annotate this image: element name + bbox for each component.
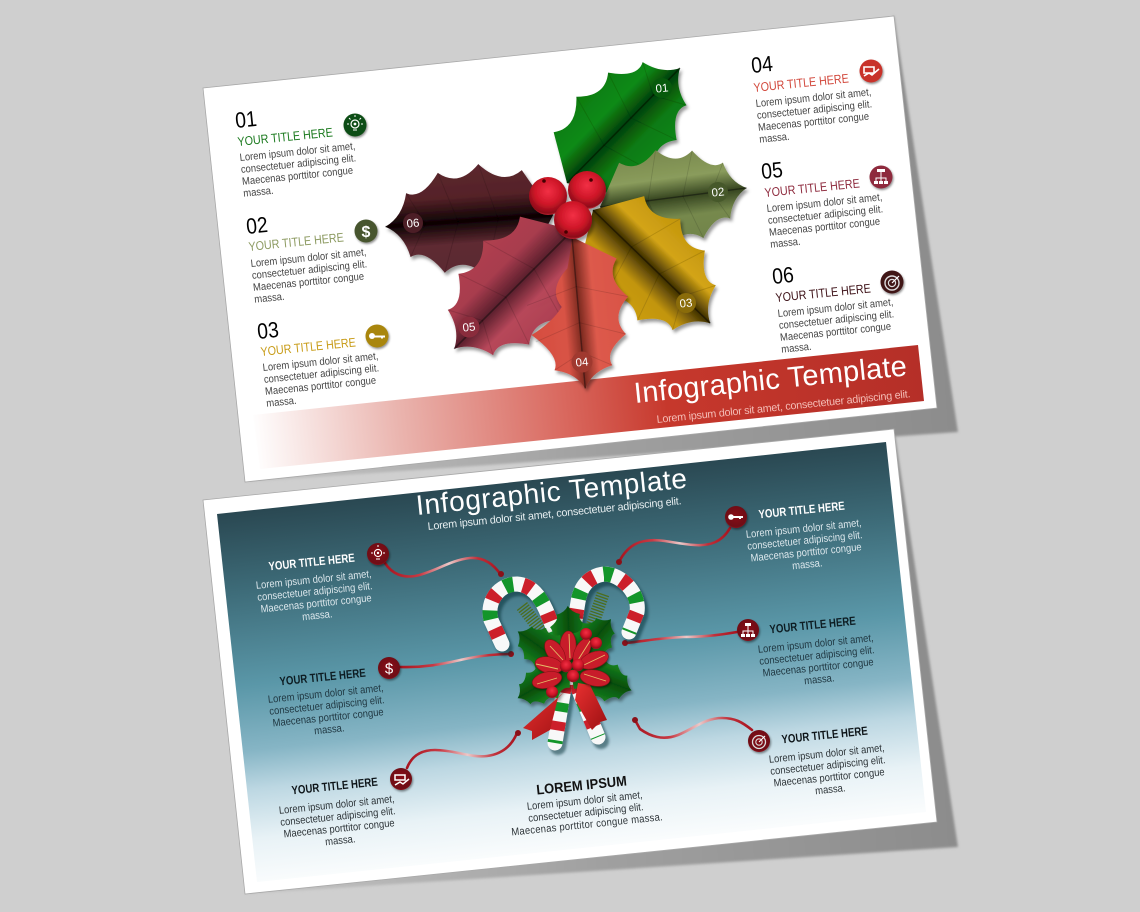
item: left 2 xyxy=(267,667,388,742)
panel: holly leaf infographic xyxy=(203,16,958,482)
item: left 2: massa. xyxy=(314,723,345,738)
leaf number 01 xyxy=(652,78,672,98)
leaf number 04: 04 xyxy=(575,356,590,370)
icon: org chart xyxy=(870,166,892,188)
panel shadow xyxy=(245,16,958,482)
panel: candy cane infographic xyxy=(203,429,958,894)
leaf 04 xyxy=(522,233,636,393)
item: right 1: YOUR TITLE HERE xyxy=(758,500,845,522)
bow xyxy=(531,631,611,691)
item 05: 05 xyxy=(760,158,784,184)
teal gradient area xyxy=(217,442,926,882)
item 02: Lorem ipsum dolor sit amet, xyxy=(250,247,367,270)
icon: target badge xyxy=(748,730,770,752)
item: right 1 xyxy=(745,500,866,577)
leaf number 06 xyxy=(403,213,423,233)
item 03 xyxy=(256,318,383,410)
icon: dollar xyxy=(354,220,378,242)
item 03: massa. xyxy=(266,395,297,410)
item 06: Lorem ipsum dolor sit amet, xyxy=(777,297,894,320)
item 02: consectetuer adipiscing elit. xyxy=(251,259,368,282)
item 01: Maecenas porttitor congue xyxy=(242,165,354,188)
leaf number 03 xyxy=(676,293,696,313)
item 03: Lorem ipsum dolor sit amet, xyxy=(262,351,379,374)
candy cane bouquet xyxy=(490,574,640,747)
item 05: Maecenas porttitor congue xyxy=(769,216,881,239)
item 01: Lorem ipsum dolor sit amet, xyxy=(239,141,356,164)
item 05: YOUR TITLE HERE xyxy=(764,177,861,200)
item: left 3: Maecenas porttitor congue xyxy=(283,818,396,841)
item 06: consectetuer adipiscing elit. xyxy=(778,309,895,332)
item: left 1: massa. xyxy=(302,609,333,624)
item 02: YOUR TITLE HERE xyxy=(248,231,345,254)
item: right 3: massa. xyxy=(815,783,846,798)
item 06: massa. xyxy=(781,341,812,356)
item: left 1: YOUR TITLE HERE xyxy=(268,552,355,574)
item 06 xyxy=(771,263,898,356)
item 01: consectetuer adipiscing elit. xyxy=(240,153,357,176)
leaf number 05: 05 xyxy=(462,321,476,335)
item 04: Maecenas porttitor congue xyxy=(758,111,870,134)
leaf 01 xyxy=(529,30,718,221)
item 04: massa. xyxy=(759,131,790,146)
item: left 1 xyxy=(255,552,376,628)
white sheet xyxy=(203,429,937,894)
item 05: consectetuer adipiscing elit. xyxy=(767,204,884,227)
banner subtitle: Lorem ipsum dolor sit amet, consectetuer adipiscing elit. xyxy=(656,388,911,426)
item: right 2: consectetuer adipiscing elit. xyxy=(759,645,875,668)
holly xyxy=(505,605,639,716)
panel shadow xyxy=(245,429,958,894)
leaf number 05 xyxy=(458,316,480,338)
panel subtitle: Lorem ipsum dolor sit amet, consectetuer adipiscing elit. xyxy=(427,495,682,533)
icon: org chart badge xyxy=(737,619,759,641)
title banner xyxy=(253,345,924,469)
item: left 1: Maecenas porttitor congue xyxy=(260,593,373,616)
item 05: Lorem ipsum dolor sit amet, xyxy=(766,192,883,215)
icon: target xyxy=(880,270,904,294)
item 01 xyxy=(234,107,360,200)
icon: dollar: $ xyxy=(362,224,371,241)
bow stripes xyxy=(536,634,606,684)
item: right 3 xyxy=(768,725,889,802)
item: right 2: Maecenas porttitor congue xyxy=(762,657,875,680)
item: left 2: Lorem ipsum dolor sit amet, xyxy=(267,683,384,706)
item: left 2: consectetuer adipiscing elit. xyxy=(269,695,385,718)
item 04 xyxy=(750,52,876,146)
item: left 3 xyxy=(278,776,399,853)
item 02: massa. xyxy=(254,291,285,306)
white sheet xyxy=(203,16,937,482)
item: right 1: massa. xyxy=(792,558,823,573)
item: left 1: Lorem ipsum dolor sit amet, xyxy=(255,569,372,592)
item: centre text: Lorem ipsum dolor sit amet, xyxy=(526,790,643,813)
item: centre text: consectetuer adipiscing elit. xyxy=(528,802,644,825)
icon: key xyxy=(366,324,388,348)
item: left 3: YOUR TITLE HERE xyxy=(291,776,378,798)
item 04: 04 xyxy=(750,52,774,78)
icon: chart xyxy=(860,60,882,82)
item: centre text: LOREM IPSUM xyxy=(536,773,627,798)
item: left 3: Lorem ipsum dolor sit amet, xyxy=(278,794,395,817)
item 01: YOUR TITLE HERE xyxy=(237,126,334,149)
bow berries xyxy=(546,628,602,698)
pine sprigs xyxy=(522,594,603,645)
item: right 3: consectetuer adipiscing elit. xyxy=(770,755,886,778)
item 01: 01 xyxy=(234,107,258,133)
item: right 2: Lorem ipsum dolor sit amet, xyxy=(757,633,874,656)
icon: dollar badge xyxy=(378,657,400,679)
item: right 1: Maecenas porttitor congue xyxy=(750,542,863,565)
leaf number 04 xyxy=(572,352,592,372)
item: right 3: Maecenas porttitor congue xyxy=(773,767,886,790)
item 04: YOUR TITLE HERE xyxy=(753,72,850,95)
item: right 3: YOUR TITLE HERE xyxy=(781,725,868,747)
bow tails xyxy=(523,683,607,740)
item: left 3: consectetuer adipiscing elit. xyxy=(280,806,396,829)
item 05 xyxy=(760,158,887,251)
ribbons xyxy=(385,528,752,768)
item: right 1: Lorem ipsum dolor sit amet, xyxy=(745,518,862,541)
leaf 03 xyxy=(555,171,748,362)
panel title: Infographic Template xyxy=(414,463,688,521)
leaf 02 xyxy=(594,139,753,256)
item 04: consectetuer adipiscing elit. xyxy=(756,99,873,122)
item: left 3: massa. xyxy=(325,834,356,849)
leaf number 06: 06 xyxy=(406,217,420,231)
item: right 2: YOUR TITLE HERE xyxy=(769,615,856,637)
item 03: YOUR TITLE HERE xyxy=(260,336,357,359)
item 04: Lorem ipsum dolor sit amet, xyxy=(755,87,872,110)
item: left 2: YOUR TITLE HERE xyxy=(279,667,366,689)
item 06: Maecenas porttitor congue xyxy=(780,321,892,344)
left cane xyxy=(490,584,598,737)
cane shadows xyxy=(493,578,640,747)
item 05: massa. xyxy=(770,236,801,251)
holly leaves xyxy=(382,30,753,393)
item 06: 06 xyxy=(771,263,795,289)
icon: key badge xyxy=(725,506,747,528)
item 02 xyxy=(245,213,371,306)
right cane xyxy=(555,574,637,743)
item: left 2: Maecenas porttitor congue xyxy=(272,707,385,730)
item: centre text xyxy=(508,773,663,839)
item 03: 03 xyxy=(256,318,280,344)
item: right 2 xyxy=(757,615,878,692)
item 02: 02 xyxy=(245,213,269,239)
item 03: Maecenas porttitor congue xyxy=(265,375,377,398)
item: right 1: consectetuer adipiscing elit. xyxy=(747,530,863,553)
leaf number 02: 02 xyxy=(711,186,725,200)
leaf number 01: 01 xyxy=(655,82,669,96)
icon: chart badge xyxy=(390,768,412,790)
item: right 3: Lorem ipsum dolor sit amet, xyxy=(768,743,885,766)
banner title: Infographic Template xyxy=(632,350,908,410)
leaf 06 xyxy=(382,159,557,283)
ribbon end dots xyxy=(498,559,638,736)
item 06: YOUR TITLE HERE xyxy=(775,282,872,305)
leaf number 03: 03 xyxy=(679,297,693,311)
item: right 2: massa. xyxy=(804,673,835,688)
item: centre text: Maecenas porttitor congue massa. xyxy=(511,812,663,839)
item 02: Maecenas porttitor congue xyxy=(253,271,365,294)
leaf 05 xyxy=(415,190,613,388)
item 01: massa. xyxy=(243,185,274,200)
item 03: consectetuer adipiscing elit. xyxy=(263,363,380,386)
item: left 1: consectetuer adipiscing elit. xyxy=(257,581,373,604)
icon: lightbulb xyxy=(344,114,366,136)
icon: dollar badge: $ xyxy=(385,660,394,678)
berries xyxy=(529,171,606,239)
leaf number 02 xyxy=(708,182,728,202)
icon: bulb badge xyxy=(367,543,389,565)
